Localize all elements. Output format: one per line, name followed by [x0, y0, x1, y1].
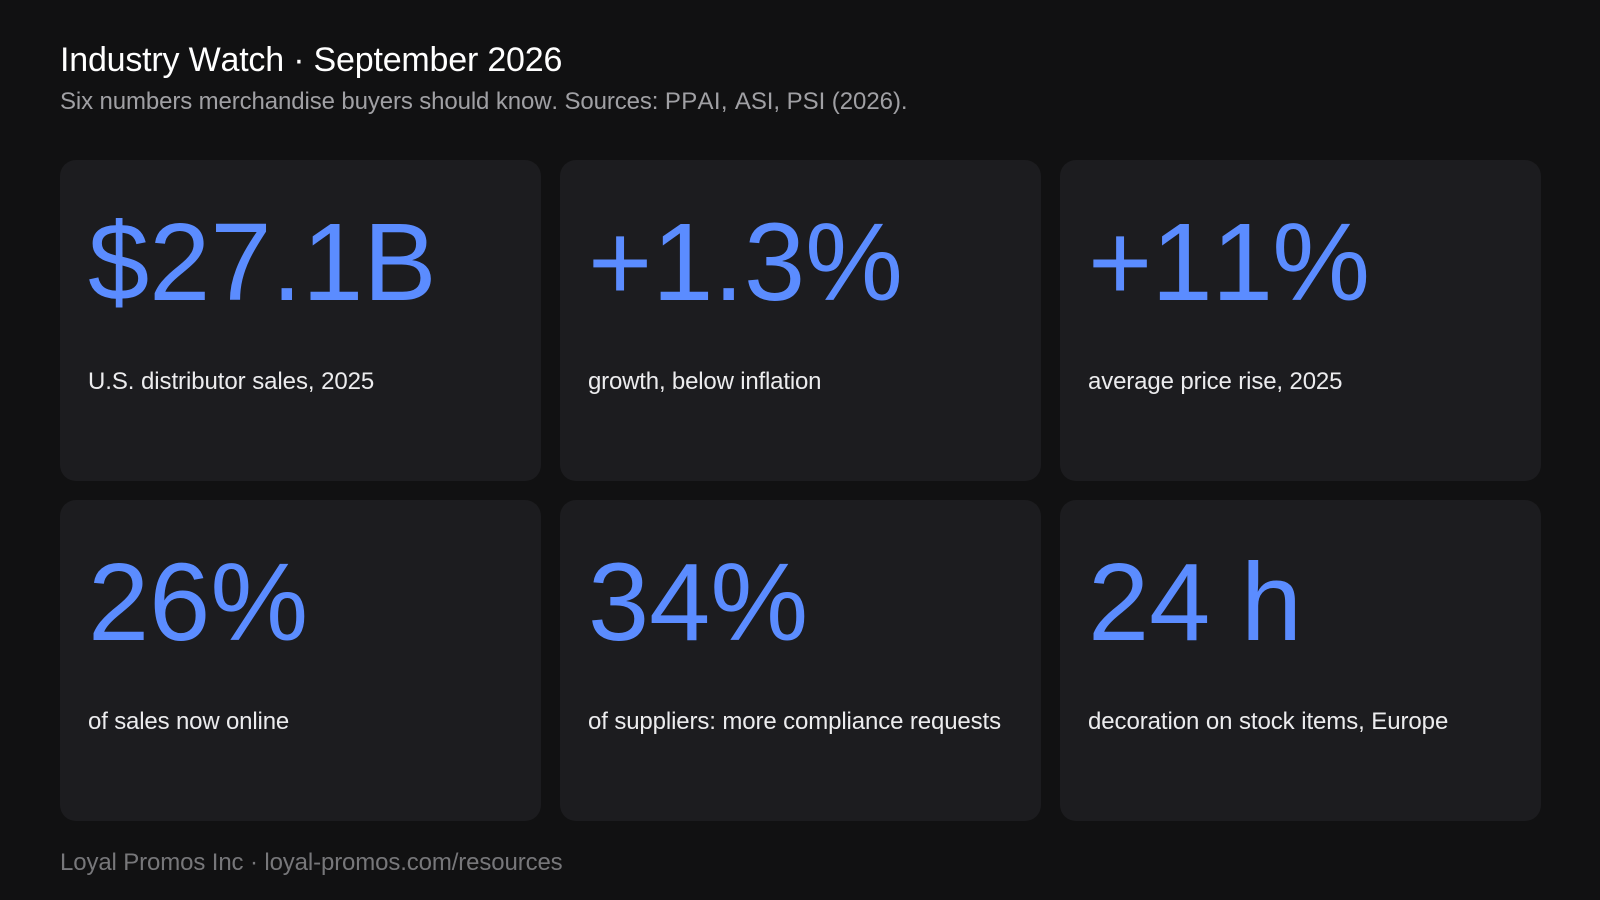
stat label: average price rise, 2025 [1088, 368, 1342, 395]
panel: online sales [60, 500, 541, 821]
stat value: 34% [588, 541, 808, 664]
stat value: $27.1B [88, 201, 437, 324]
panel: price rise [1060, 160, 1541, 481]
stat value: 26% [88, 541, 308, 664]
stat label: of suppliers: more compliance requests [588, 708, 1001, 735]
panel: growth [560, 160, 1041, 481]
stat label: growth, below inflation [588, 368, 821, 395]
title: Industry Watch · September 2026 [60, 41, 562, 79]
panel: distributor sales [60, 160, 541, 481]
stat label: U.S. distributor sales, 2025 [88, 368, 374, 395]
stat value: +11% [1088, 201, 1369, 324]
stat label: decoration on stock items, Europe [1088, 708, 1448, 735]
panel: compliance requests [560, 500, 1041, 821]
subtitle: Six numbers merchandise buyers should know. Sources: PPAI, ASI, PSI (2026). [60, 88, 908, 115]
stat value: +1.3% [588, 201, 903, 324]
panel: decoration time [1060, 500, 1541, 821]
footer: Loyal Promos Inc · loyal-promos.com/resources [60, 849, 563, 876]
stat value: 24 h [1088, 541, 1302, 664]
stat label: of sales now online [88, 708, 289, 735]
